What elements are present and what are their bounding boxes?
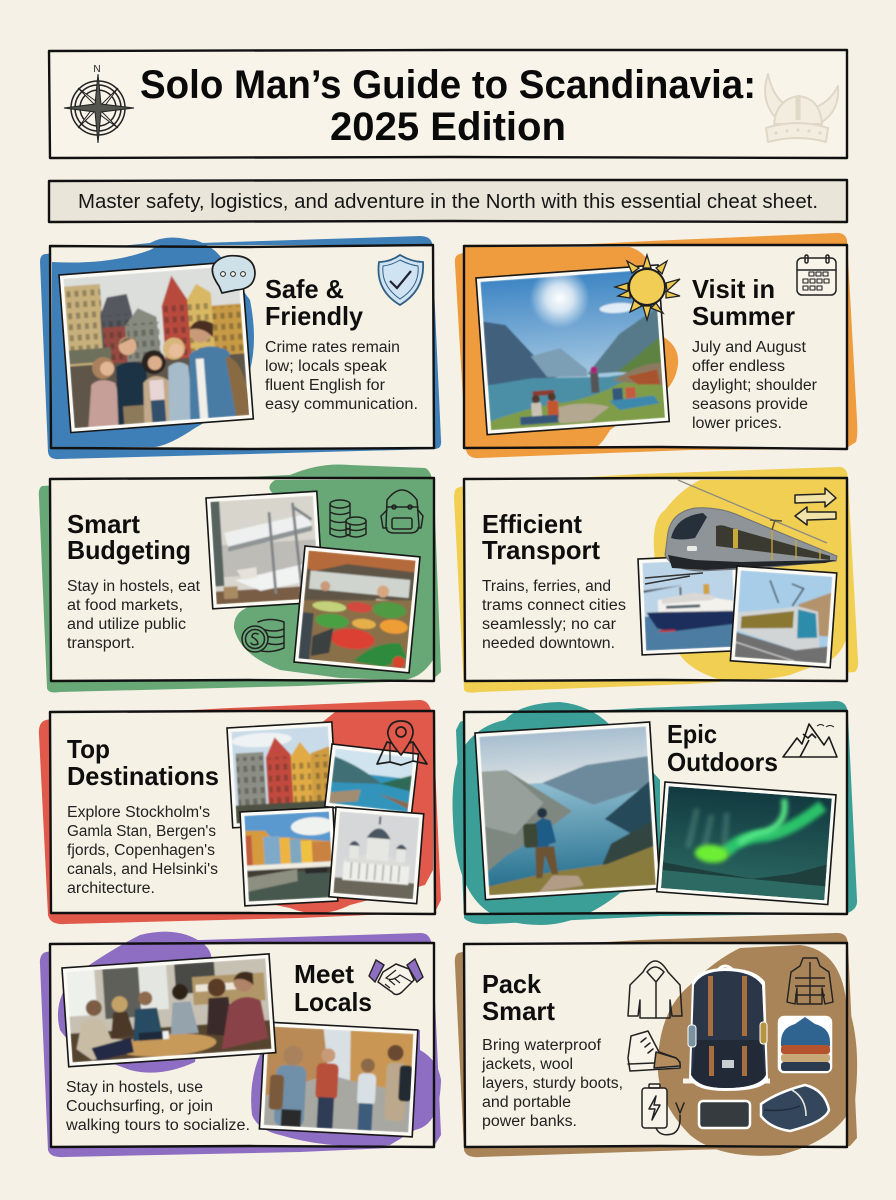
body text: smart budgeting: and utilize public bbox=[67, 616, 186, 633]
body text: efficient transport: trams connect cities bbox=[482, 597, 626, 614]
body text: visit in summer: July and August bbox=[692, 339, 807, 356]
body text: smart budgeting: transport. bbox=[67, 635, 135, 652]
heading: safe and friendly: Safe & bbox=[265, 274, 344, 304]
icon: viking helmet bbox=[765, 74, 838, 142]
photo: friends in old town bbox=[59, 261, 253, 433]
body text: safe and friendly: fluent English for bbox=[265, 377, 385, 394]
body text: pack smart bbox=[481, 1037, 623, 1130]
heading: meet locals bbox=[294, 959, 372, 1017]
body text: smart budgeting: at food markets, bbox=[67, 597, 183, 614]
photo: tram bbox=[730, 566, 837, 668]
heading: safe and friendly bbox=[265, 274, 364, 331]
heading: meet locals: Meet bbox=[294, 959, 354, 989]
body text: meet locals: walking tours to socialize. bbox=[65, 1117, 250, 1134]
heading: efficient transport: Transport bbox=[482, 535, 600, 565]
heading: pack smart: Pack bbox=[482, 969, 542, 999]
photo: hostel common room bbox=[62, 954, 276, 1067]
panel: efficient transport bbox=[454, 467, 858, 693]
heading: efficient transport: Efficient bbox=[482, 509, 582, 539]
icon: power bank bbox=[642, 1084, 684, 1135]
panel: smart budgeting bbox=[39, 464, 441, 692]
title text: Solo Man’s Guide to Scandinavia: bbox=[140, 63, 756, 107]
body text: top destinations: architecture. bbox=[67, 880, 155, 897]
photo: Bergen fjords bbox=[325, 744, 418, 817]
photo: fjord in summer bbox=[476, 261, 669, 435]
icon: two-way arrows bbox=[795, 488, 836, 525]
icon: hiking boot bbox=[628, 1031, 680, 1071]
icon: compass rose: N bbox=[93, 64, 101, 75]
body text: pack smart: and portable bbox=[482, 1094, 571, 1111]
illustration: navy backpack bbox=[683, 966, 770, 1091]
icon: mountains bbox=[783, 724, 837, 757]
heading: epic outdoors: Outdoors bbox=[667, 747, 778, 777]
heading: visit in summer: Visit in bbox=[692, 274, 775, 304]
heading: smart budgeting: Smart bbox=[67, 509, 140, 539]
title text: 2025 Edition bbox=[330, 105, 566, 149]
heading: top destinations: Top bbox=[67, 734, 110, 764]
body text: visit in summer: offer endless bbox=[692, 358, 785, 375]
icon: rain jacket bbox=[628, 961, 682, 1018]
photo: Stockholm Gamla Stan bbox=[227, 722, 338, 828]
body text: visit in summer: lower prices. bbox=[692, 415, 782, 432]
body text: top destinations: Gamla Stan, Bergen's bbox=[67, 823, 216, 840]
heading: efficient transport bbox=[482, 509, 600, 565]
body text: safe and friendly: Crime rates remain bbox=[265, 339, 400, 356]
illustration: folded clothes bbox=[779, 1017, 831, 1072]
panel: visit in summer bbox=[455, 233, 857, 458]
icon: handshake bbox=[369, 959, 423, 994]
body text: visit in summer: seasons provide bbox=[692, 396, 808, 413]
heading: safe and friendly: Friendly bbox=[265, 301, 364, 331]
photo: food market bbox=[294, 546, 420, 673]
icon: backpack bbox=[381, 490, 423, 533]
body text: top destinations: Explore Stockholm's bbox=[67, 804, 210, 821]
body text: safe and friendly: easy communication. bbox=[265, 396, 418, 413]
photo: Copenhagen canals bbox=[240, 807, 339, 906]
icon: speech bubble bbox=[212, 256, 255, 293]
panel: top destinations bbox=[39, 700, 441, 924]
heading: meet locals: Locals bbox=[294, 987, 372, 1017]
heading: visit in summer bbox=[692, 274, 795, 331]
body text: safe and friendly bbox=[265, 339, 418, 413]
heading: epic outdoors: Epic bbox=[667, 719, 717, 749]
heading: smart budgeting: Budgeting bbox=[67, 535, 191, 565]
body text: smart budgeting: Stay in hostels, eat bbox=[67, 578, 201, 595]
photo: hiker above fjord bbox=[475, 722, 660, 900]
icon: calendar bbox=[797, 255, 836, 295]
body text: meet locals bbox=[65, 1079, 250, 1134]
panel: pack smart bbox=[455, 933, 857, 1157]
overhead wire bbox=[678, 480, 827, 543]
body text: meet locals: Stay in hostels, use bbox=[66, 1079, 203, 1096]
body text: top destinations bbox=[67, 804, 218, 897]
icon: sun bbox=[615, 255, 680, 320]
body text: efficient transport bbox=[482, 578, 626, 652]
heading: visit in summer: Summer bbox=[692, 301, 795, 331]
illustration: high-speed train bbox=[645, 508, 837, 584]
photo: ferry bbox=[638, 555, 740, 655]
illustration: folded blanket bbox=[761, 1085, 829, 1131]
photo: friends walking in street bbox=[259, 1022, 418, 1137]
body text: pack smart: layers, sturdy boots, bbox=[482, 1075, 623, 1092]
body text: pack smart: Bring waterproof bbox=[482, 1037, 602, 1054]
body text: efficient transport: needed downtown. bbox=[482, 635, 615, 652]
body text: meet locals: Couchsurfing, or join bbox=[66, 1098, 213, 1115]
body text: efficient transport: Trains, ferries, and bbox=[482, 578, 611, 595]
title text bbox=[140, 63, 756, 149]
heading: top destinations: Destinations bbox=[67, 761, 219, 791]
photo: northern lights bbox=[657, 782, 836, 905]
heading: pack smart bbox=[482, 969, 555, 1026]
subtitle banner bbox=[49, 180, 847, 222]
body text: visit in summer bbox=[692, 339, 817, 432]
photo: Helsinki Cathedral bbox=[329, 807, 424, 904]
body text: pack smart: power banks. bbox=[482, 1113, 577, 1130]
body text: visit in summer: daylight; shoulder bbox=[692, 377, 817, 394]
icon: coins bbox=[242, 620, 284, 652]
body text: top destinations: fjords, Copenhagen's bbox=[67, 842, 215, 859]
icon: coin stack bbox=[330, 500, 366, 537]
body text: smart budgeting bbox=[67, 578, 201, 652]
photo: hostel bunk beds bbox=[206, 491, 324, 609]
panel: epic outdoors bbox=[452, 701, 857, 925]
panel: meet locals bbox=[40, 932, 441, 1157]
icon: puffer jacket bbox=[787, 958, 833, 1004]
heading: epic outdoors bbox=[667, 719, 778, 777]
title banner bbox=[49, 50, 847, 158]
heading: pack smart: Smart bbox=[482, 996, 555, 1026]
icon: compass rose bbox=[64, 64, 134, 143]
body text: safe and friendly: low; locals speak bbox=[265, 358, 387, 375]
illustration: black power bank bbox=[699, 1101, 750, 1128]
icon: map pin bbox=[377, 721, 427, 765]
heading: top destinations bbox=[67, 734, 219, 791]
icon: shield bbox=[378, 255, 423, 305]
body text: efficient transport: seamlessly; no car bbox=[482, 616, 616, 633]
heading: smart budgeting bbox=[67, 509, 191, 565]
body text: top destinations: canals, and Helsinki's bbox=[67, 861, 218, 878]
subtitle banner: Master safety, logistics, and adventure in the North with this essential cheat sheet. bbox=[78, 191, 818, 213]
body text: pack smart: jackets, wool bbox=[481, 1056, 573, 1073]
panel: safe and friendly bbox=[40, 236, 441, 459]
